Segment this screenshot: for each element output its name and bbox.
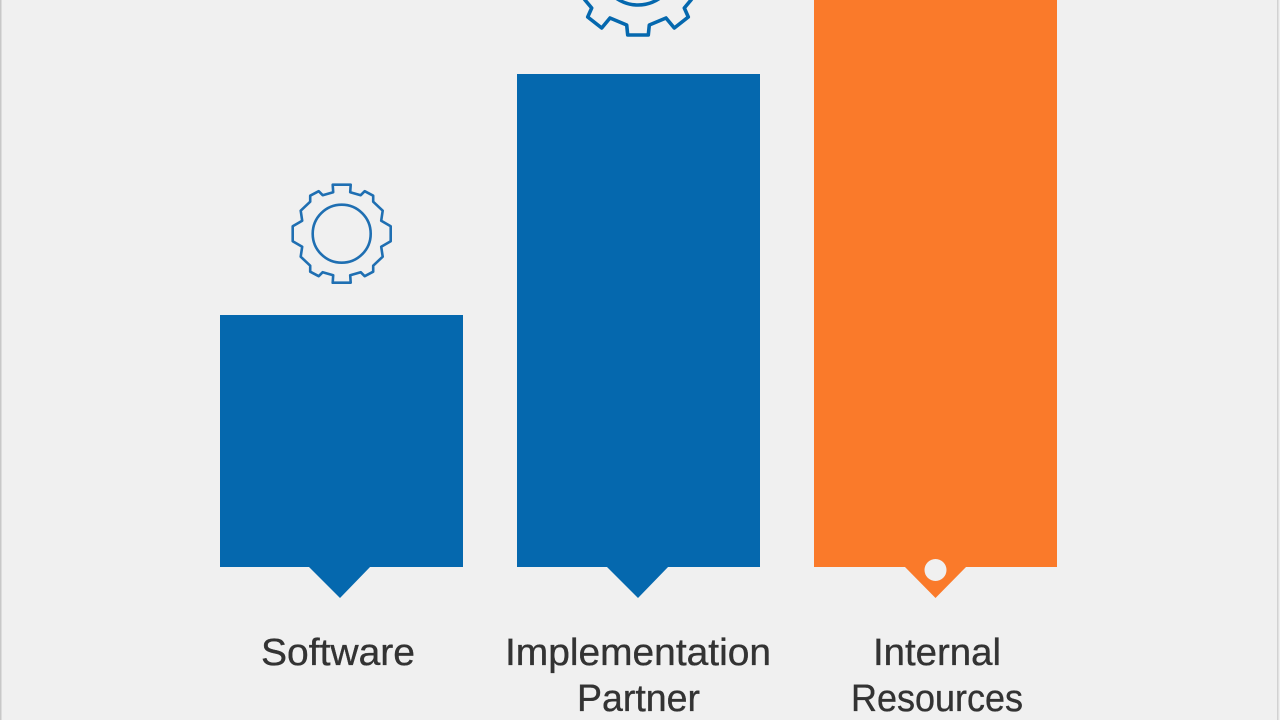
- icon: gear above Implementation Partner: [578, 0, 698, 35]
- bar: Internal Resources: [814, 0, 1057, 598]
- label: Software: Software: [261, 632, 415, 674]
- icon: gear above Software: [293, 185, 391, 283]
- label: Internal Resources: Internal: [873, 632, 1001, 674]
- bar: Software: [220, 315, 463, 598]
- label: Implementation Partner: Partner: [577, 678, 700, 720]
- bar: Implementation Partner: [517, 74, 760, 598]
- label: Internal Resources: [851, 632, 1023, 720]
- label: Internal Resources: Resources: [851, 678, 1023, 720]
- label: Implementation Partner: [505, 632, 771, 720]
- label: Implementation Partner: Implementation: [505, 632, 771, 674]
